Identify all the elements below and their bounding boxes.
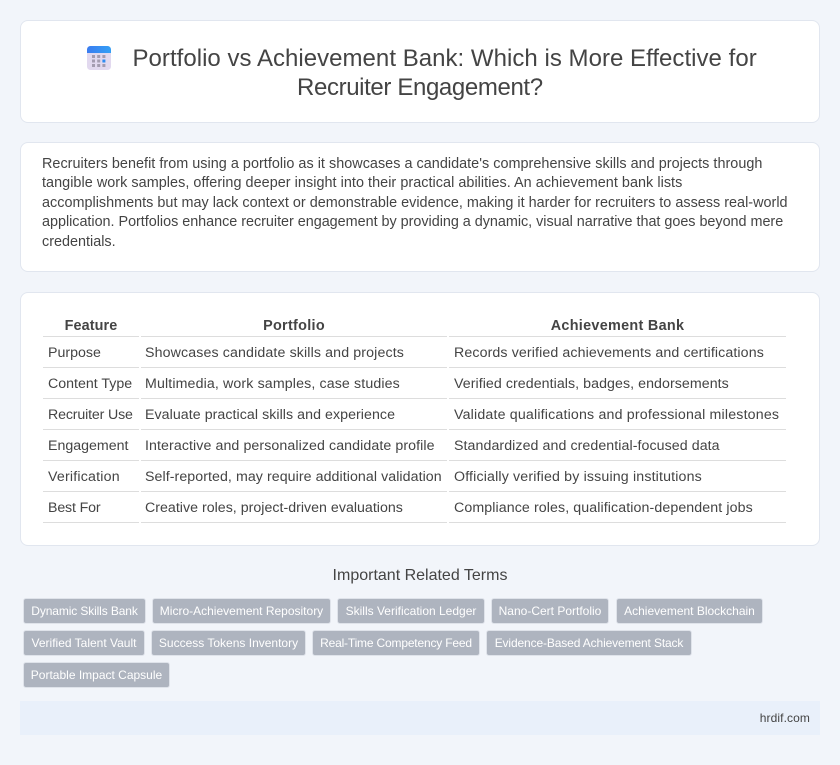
table row: content type: Multimedia, work samples, case studies (145, 376, 400, 392)
intro paragraph: accomplishments but may lack context or demonstrable evidence, making it harder for recruiters to assess real-world (42, 195, 788, 211)
table row: verification: Officially verified by issuing institutions (454, 469, 702, 485)
table header row: Achievement Bank (551, 318, 684, 334)
table row: best for (48, 500, 753, 516)
tag (151, 630, 306, 656)
tag (23, 630, 145, 656)
table row: engagement: Standardized and credential-focused data (454, 438, 720, 454)
table row: verification: Verification (48, 469, 120, 485)
table row: purpose: Showcases candidate skills and projects (145, 345, 404, 361)
table row: recruiter use: Validate qualifications and professional milestones (454, 407, 779, 423)
tag (491, 598, 609, 624)
table row: engagement: Engagement (48, 438, 128, 454)
tag: Success Tokens Inventory (159, 636, 298, 650)
table row: purpose (48, 345, 764, 361)
panel: header (20, 20, 820, 123)
intro paragraph: Recruiters benefit from using a portfolio as it showcases a candidate's comprehensive skills and projects through (42, 156, 762, 172)
tag (337, 598, 485, 624)
tag: Achievement Blockchain (624, 604, 755, 618)
table row: verification: Self-reported, may require additional validation (145, 469, 442, 485)
title: Portfolio vs Achievement Bank: Which is More Effective for (132, 45, 757, 72)
table header row: Feature (65, 318, 117, 334)
table row: engagement (48, 438, 720, 454)
table header row: Portfolio (263, 318, 325, 334)
table row: content type: Verified credentials, badges, endorsements (454, 376, 729, 392)
icon: calendar (87, 46, 111, 70)
intro paragraph: credentials. (42, 234, 116, 250)
table header row (65, 318, 684, 334)
title (132, 45, 757, 101)
table row: purpose: Records verified achievements and certifications (454, 345, 764, 361)
panel: comparison table (20, 292, 820, 546)
tag (152, 598, 331, 624)
intro paragraph: tangible work samples, offering deeper insight into their practical abilities. An achievement bank lists (42, 175, 682, 191)
tag: Micro-Achievement Repository (160, 604, 323, 618)
panel: introduction (20, 142, 820, 272)
intro paragraph: application. Portfolios enhance recruiter engagement by providing a dynamic, visual narrative that goes beyond mere (42, 214, 783, 230)
tag (486, 630, 692, 656)
tag (23, 598, 146, 624)
tag (616, 598, 763, 624)
table row: recruiter use (48, 407, 779, 423)
footer credit: hrdif.com (760, 711, 810, 725)
table row: best for: Creative roles, project-driven evaluations (145, 500, 403, 516)
tag: Dynamic Skills Bank (31, 604, 138, 618)
tag: Verified Talent Vault (32, 636, 136, 650)
related term tags (23, 598, 763, 688)
tag: Evidence-Based Achievement Stack (495, 636, 683, 650)
title: Recruiter Engagement? (297, 74, 543, 101)
table row: best for: Best For (48, 500, 100, 516)
tag (312, 630, 480, 656)
tag: Skills Verification Ledger (346, 604, 476, 618)
table row: content type (48, 376, 729, 392)
footer (20, 701, 820, 735)
tag: Real-Time Competency Feed (320, 636, 472, 650)
table row: purpose: Purpose (48, 345, 101, 361)
tag: Nano-Cert Portfolio (499, 604, 601, 618)
table row: engagement: Interactive and personalized candidate profile (145, 438, 435, 454)
table row: best for: Compliance roles, qualification-dependent jobs (454, 500, 753, 516)
related terms heading: Important Related Terms (333, 567, 507, 584)
table row: verification (48, 469, 702, 485)
table row: content type: Content Type (48, 376, 132, 392)
tag: Portable Impact Capsule (31, 668, 162, 682)
tag (23, 662, 170, 688)
table row: recruiter use: Evaluate practical skills and experience (145, 407, 395, 423)
intro paragraph (42, 156, 788, 250)
table row: recruiter use: Recruiter Use (48, 407, 133, 423)
